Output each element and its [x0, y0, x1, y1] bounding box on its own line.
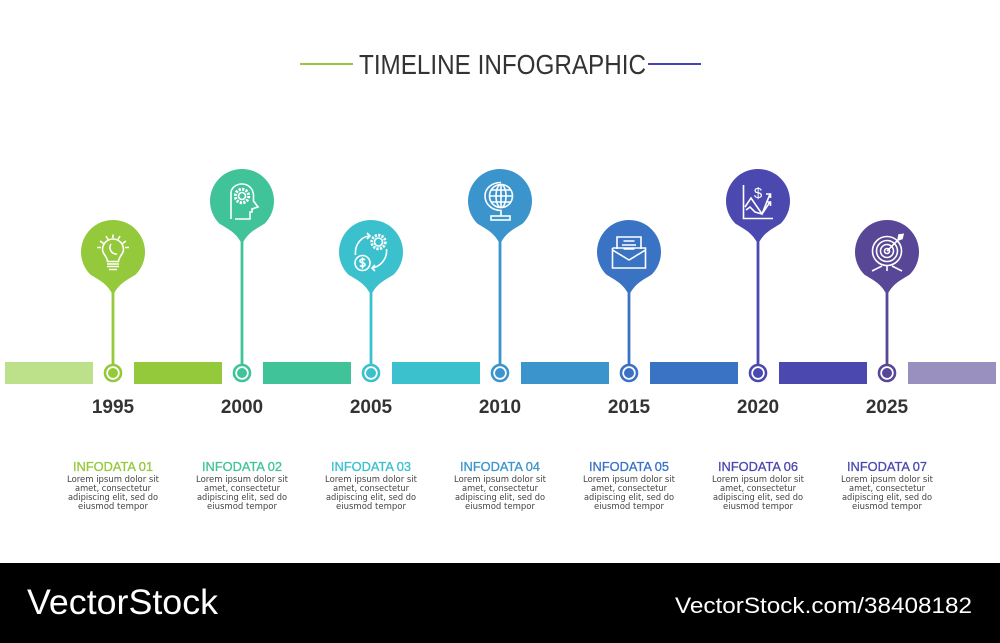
milestone 2015 [583, 220, 675, 512]
label: infodata 06: eiusmod tempor [723, 502, 793, 512]
label: infodata 07: Lorem ipsum dolor sit [841, 475, 933, 485]
icon: globe [485, 182, 512, 220]
label: infodata 05: adipiscing elit, sed do [584, 493, 674, 503]
label: infodata 04 [454, 459, 546, 512]
milestone 2010: 2010 [479, 397, 521, 418]
milestone 2025 [841, 220, 933, 512]
label: infodata 07: amet, consectetur [849, 484, 925, 494]
label: infodata 02: eiusmod tempor [207, 502, 277, 512]
label: infodata 03: Lorem ipsum dolor sit [325, 475, 417, 485]
label: infodata 06: INFODATA 06 [718, 459, 798, 474]
icon: growth chart: $ [754, 185, 763, 202]
timeline bars [5, 362, 996, 384]
label: infodata 04: amet, consectetur [462, 484, 538, 494]
label: infodata 03: INFODATA 03 [331, 459, 411, 474]
label: infodata 02 [196, 459, 288, 512]
milestone 2015: 2015 [608, 397, 651, 418]
label: infodata 05: eiusmod tempor [594, 502, 664, 512]
label: infodata 01: amet, consectetur [75, 484, 151, 494]
label: infodata 06: amet, consectetur [720, 484, 796, 494]
label: infodata 07 [841, 459, 933, 512]
label: infodata 02: amet, consectetur [204, 484, 280, 494]
milestone 1995: 1995 [92, 397, 135, 418]
icon: target with arrow [872, 234, 903, 271]
label: infodata 06: adipiscing elit, sed do [713, 493, 803, 503]
milestone 2025: 2025 [866, 397, 909, 418]
title: TIMELINE INFOGRAPHIC [359, 49, 646, 80]
icon: money and gear cycle [355, 233, 387, 271]
icon: head with gear [231, 184, 258, 219]
label: infodata 04: eiusmod tempor [465, 502, 535, 512]
footer banner [0, 563, 1000, 643]
label: infodata 04: adipiscing elit, sed do [455, 493, 545, 503]
label: infodata 06: Lorem ipsum dolor sit [712, 475, 804, 485]
label: infodata 01: INFODATA 01 [73, 459, 153, 474]
label: infodata 01 [67, 459, 159, 512]
footer banner: VectorStock [27, 583, 219, 622]
label: infodata 02: adipiscing elit, sed do [197, 493, 287, 503]
label: infodata 05: amet, consectetur [591, 484, 667, 494]
icon: open envelope [612, 237, 646, 268]
label: infodata 01: eiusmod tempor [78, 502, 148, 512]
label: infodata 06 [712, 459, 804, 512]
milestone 2010 [454, 169, 546, 512]
label: infodata 07: INFODATA 07 [847, 459, 927, 474]
label: infodata 01: Lorem ipsum dolor sit [67, 475, 159, 485]
label: infodata 05: Lorem ipsum dolor sit [583, 475, 675, 485]
label: infodata 02: INFODATA 02 [202, 459, 282, 474]
milestone 2005 [325, 220, 417, 512]
label: infodata 03: eiusmod tempor [336, 502, 406, 512]
icon: light bulb [97, 234, 129, 270]
label: infodata 07: adipiscing elit, sed do [842, 493, 932, 503]
milestone 2020: 2020 [737, 397, 779, 418]
milestone 2000 [196, 169, 288, 512]
milestone 2020 [712, 169, 804, 512]
milestone 2005: 2005 [350, 397, 393, 418]
label: infodata 05 [583, 459, 675, 512]
label: infodata 01: adipiscing elit, sed do [68, 493, 158, 503]
label: infodata 04: Lorem ipsum dolor sit [454, 475, 546, 485]
label: infodata 03: amet, consectetur [333, 484, 409, 494]
label: infodata 04: INFODATA 04 [460, 459, 540, 474]
milestone 1995 [67, 220, 159, 512]
label: infodata 07: eiusmod tempor [852, 502, 922, 512]
label: infodata 03 [325, 459, 417, 512]
label: infodata 03: adipiscing elit, sed do [326, 493, 416, 503]
icon: growth chart [744, 185, 773, 218]
label: infodata 05: INFODATA 05 [589, 459, 669, 474]
milestone 2000: 2000 [221, 397, 263, 418]
label: infodata 02: Lorem ipsum dolor sit [196, 475, 288, 485]
footer banner: VectorStock.com/38408182 [675, 593, 972, 618]
